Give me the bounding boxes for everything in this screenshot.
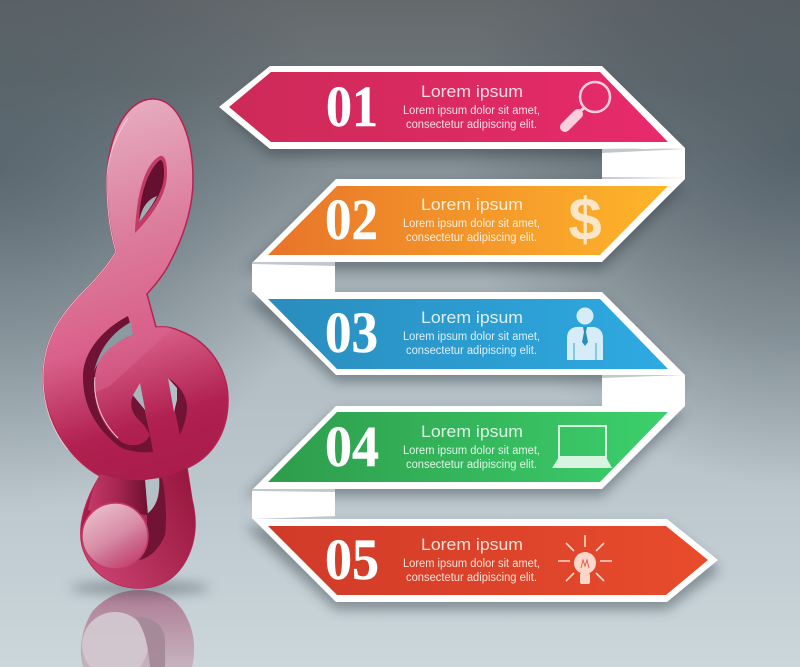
banner 01 text: Lorem ipsum dolor sit amet, bbox=[403, 105, 540, 117]
banner 04 colour band bbox=[268, 412, 668, 482]
banner 01 text: Lorem ipsum bbox=[421, 82, 523, 101]
banner 03 white border bbox=[253, 292, 685, 375]
clef note cylinder bbox=[88, 474, 148, 515]
banner 04 text bbox=[403, 422, 540, 471]
clef floor shadow bbox=[70, 582, 210, 594]
fold shading wedges bbox=[252, 149, 685, 519]
icon: magnifier bbox=[565, 82, 610, 127]
banner 02 bbox=[252, 179, 685, 292]
banner 02 text: Lorem ipsum dolor sit amet, bbox=[403, 218, 540, 230]
clef centre left hole bbox=[131, 383, 150, 436]
banner 02 fold connector bbox=[252, 262, 335, 292]
treble clef bbox=[43, 99, 228, 667]
banner 05 colour band bbox=[268, 526, 708, 595]
clef floor reflection bbox=[81, 590, 194, 667]
banner 04 white border bbox=[253, 406, 685, 489]
banner 05 bbox=[253, 519, 718, 602]
banner 03 fold connector bbox=[602, 375, 685, 406]
banner 05 white border bbox=[253, 519, 718, 602]
banner 04 text: Lorem ipsum bbox=[421, 422, 523, 441]
banner 03 text: Lorem ipsum dolor sit amet, bbox=[403, 331, 540, 343]
banner 03 text bbox=[403, 308, 540, 357]
banner shadows bbox=[225, 74, 720, 610]
banner 02 number: 02 bbox=[325, 187, 378, 252]
clef lower hook shading bbox=[82, 468, 195, 588]
icon: person bbox=[567, 308, 603, 360]
banner 02 colour band bbox=[268, 186, 668, 255]
banner 03 number: 03 bbox=[325, 300, 378, 365]
icon: light bulb bbox=[558, 535, 612, 584]
banner 01 colour band bbox=[229, 72, 668, 142]
banner 03 bbox=[253, 292, 685, 406]
banner 02 white border bbox=[253, 179, 685, 262]
banner 01 text bbox=[403, 82, 540, 131]
icon: laptop bbox=[552, 426, 612, 468]
banner 03 text: Lorem ipsum bbox=[421, 308, 523, 327]
banner 02 text: Lorem ipsum bbox=[421, 195, 523, 214]
banner 02 text: consectetur adipiscing elit. bbox=[406, 232, 537, 244]
clef centre right hole bbox=[168, 378, 187, 435]
clef inner crescent bbox=[83, 316, 153, 452]
banner 05 text: consectetur adipiscing elit. bbox=[406, 572, 537, 584]
clef hook window bbox=[145, 478, 159, 514]
banner 01 bbox=[219, 66, 685, 179]
banner 01 text: consectetur adipiscing elit. bbox=[406, 119, 537, 131]
banner 04 number: 04 bbox=[325, 414, 379, 479]
banner 05 text: Lorem ipsum bbox=[421, 535, 523, 554]
banner 02 text bbox=[403, 195, 540, 244]
banner 01 fold connector bbox=[602, 148, 685, 179]
icon: dollar sign: $ bbox=[568, 186, 602, 253]
banner 05 text bbox=[403, 535, 540, 584]
clef hook inner shadow bbox=[133, 478, 166, 560]
clef top loop hole bbox=[135, 156, 167, 233]
banner 03 text: consectetur adipiscing elit. bbox=[406, 345, 537, 357]
clef left edge highlight bbox=[43, 118, 128, 450]
banner 04 fold connector bbox=[252, 489, 335, 519]
banner 01 white border bbox=[219, 66, 685, 149]
banner 05 text: Lorem ipsum dolor sit amet, bbox=[403, 558, 540, 570]
banner 04 text: consectetur adipiscing elit. bbox=[406, 459, 537, 471]
banner 05 number: 05 bbox=[325, 527, 379, 592]
banner 04 bbox=[252, 406, 685, 519]
clef bowl sheen bbox=[95, 327, 172, 392]
clef front face bbox=[43, 99, 228, 588]
clef note head bbox=[82, 503, 148, 569]
banner 03 colour band bbox=[268, 299, 668, 369]
banner 01 number: 01 bbox=[326, 74, 378, 139]
banner 04 text: Lorem ipsum dolor sit amet, bbox=[403, 445, 540, 457]
